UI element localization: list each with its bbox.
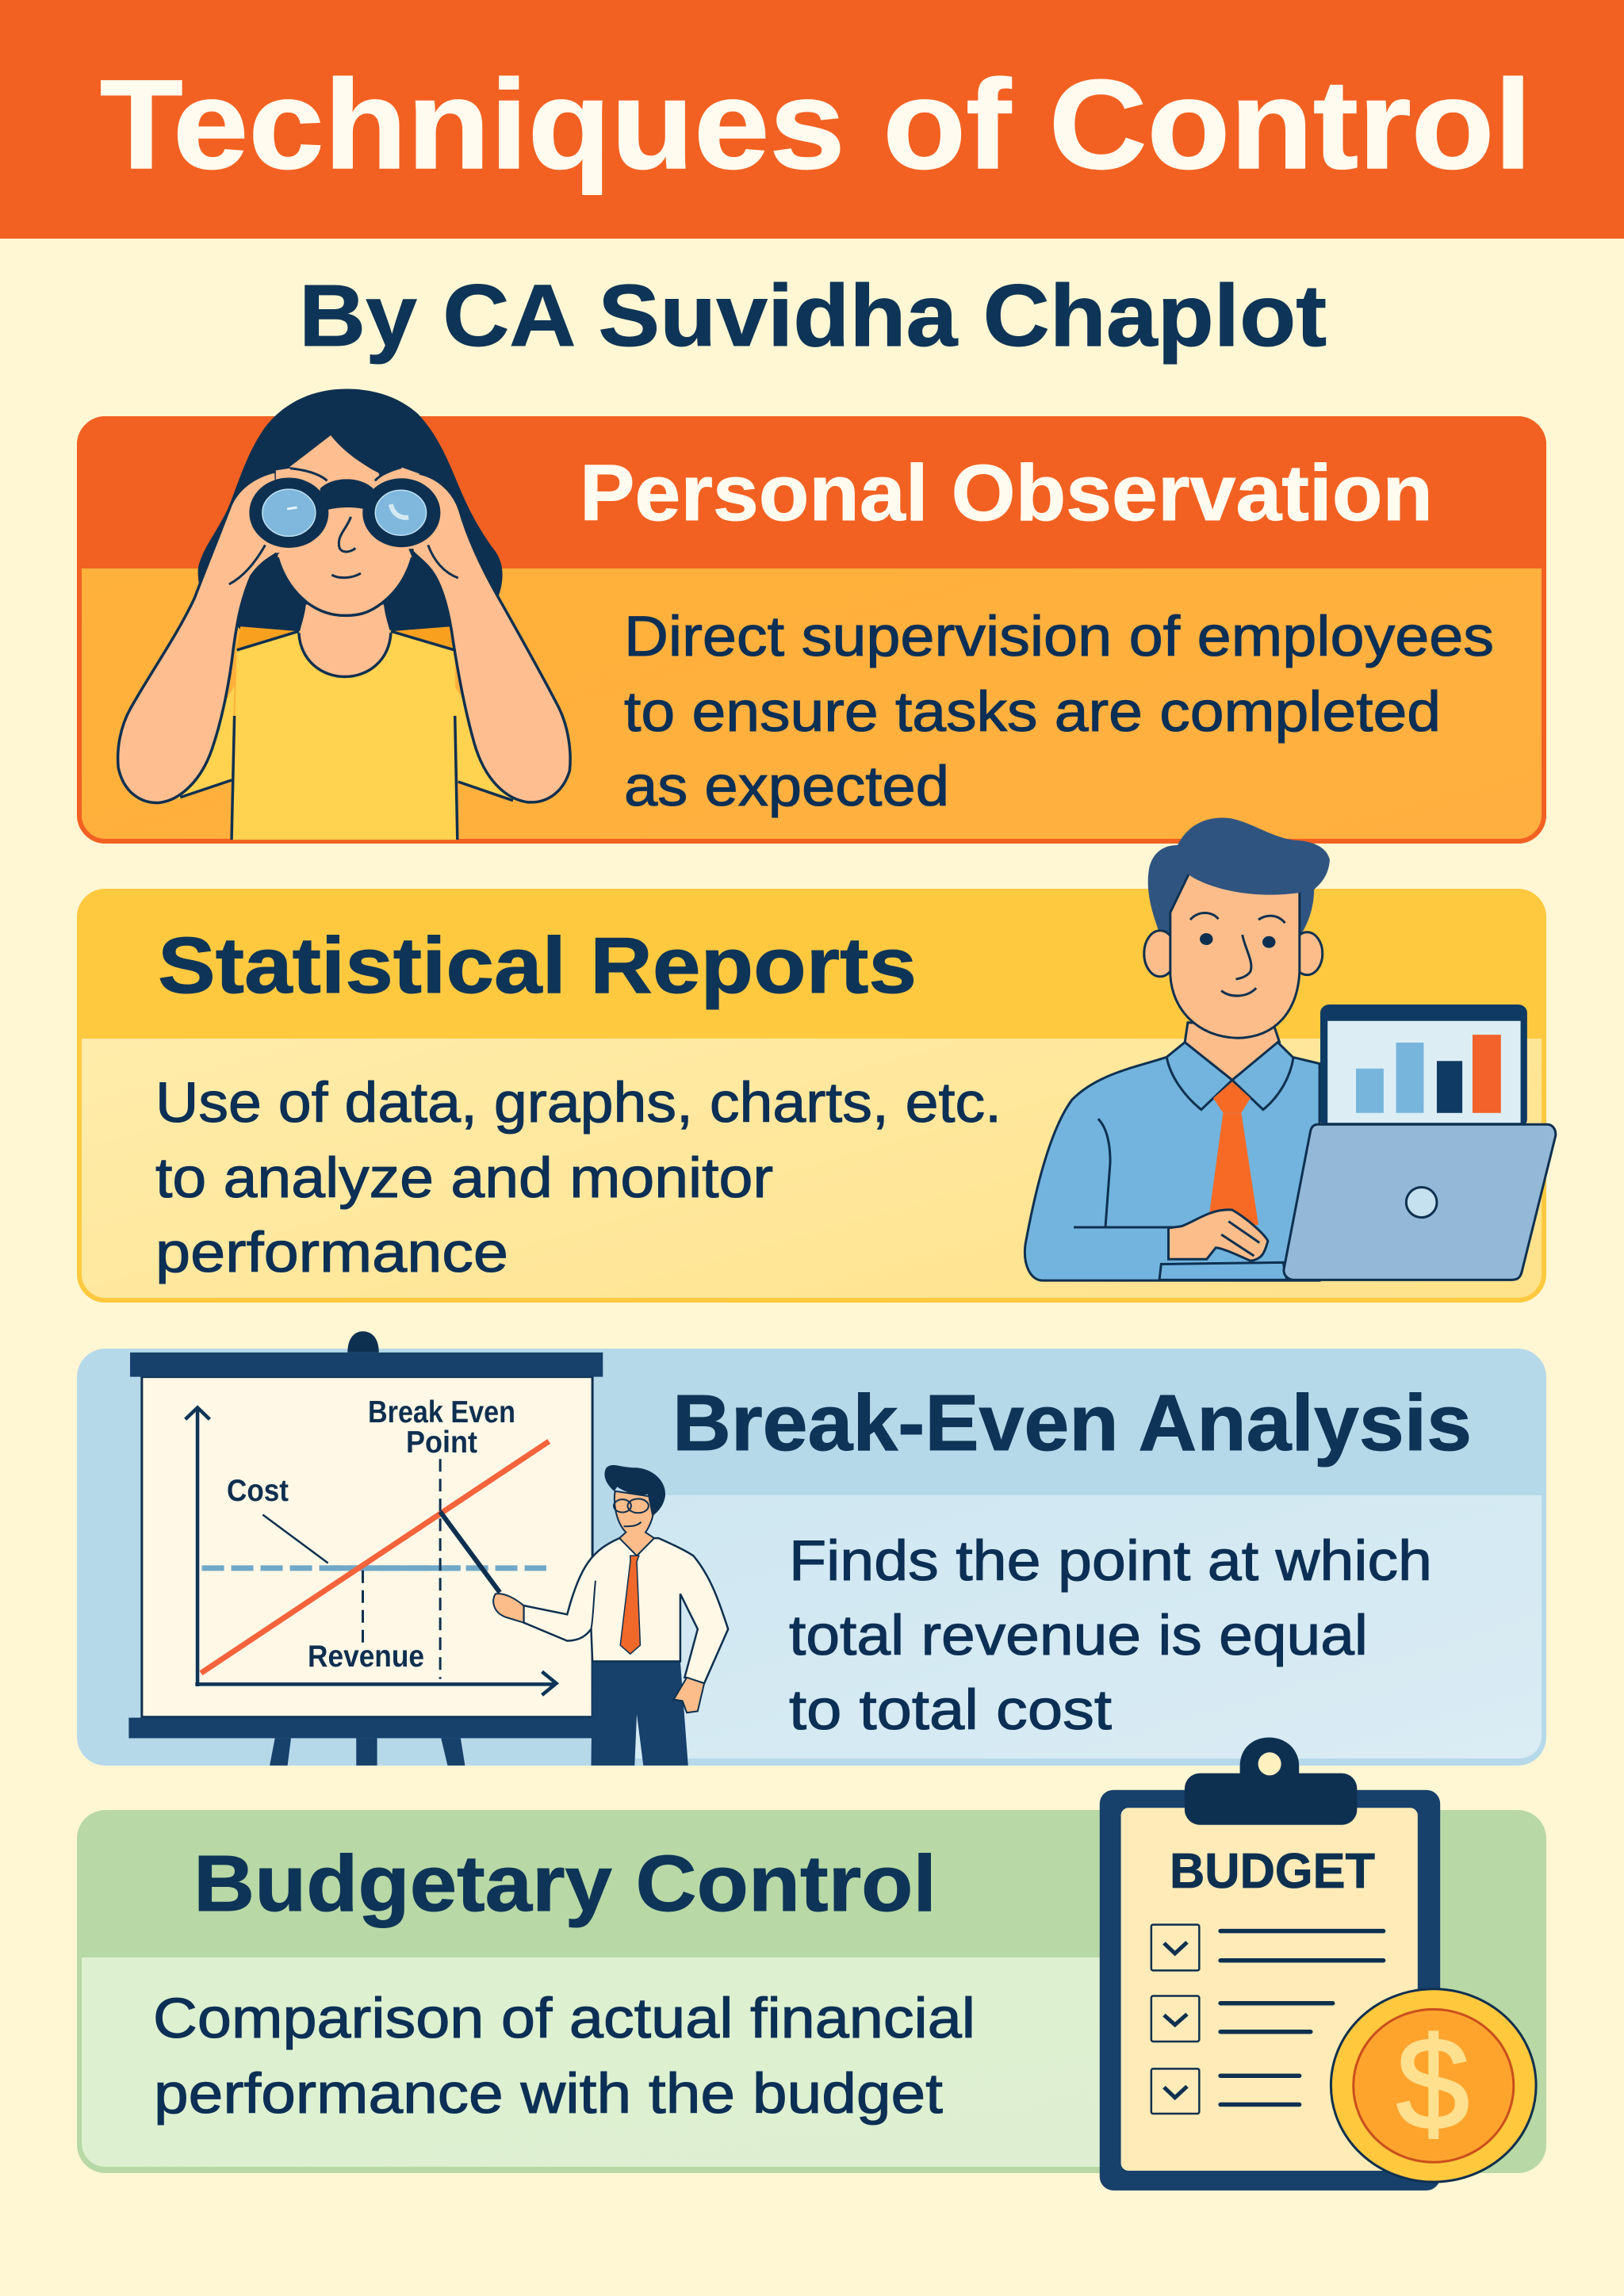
panel: budgetary control (77, 1810, 1546, 2173)
heading: personal observation: Personal Observation (580, 449, 1433, 538)
label: revenue: Revenue (308, 1640, 424, 1674)
icon: man with laptop chart (1025, 817, 1556, 1280)
icon: budget clipboard (1100, 1737, 1536, 2191)
text: personal observation description: to ensure tasks are completed (624, 681, 1441, 744)
text: personal observation description: Direct supervision of employees (624, 606, 1494, 668)
label: break even point: Point (406, 1425, 477, 1460)
icon: dollar sign: $ (1396, 2011, 1469, 2156)
icon: presenter with pointer (440, 1465, 728, 1766)
label: break even point: Break Even (368, 1395, 515, 1429)
panel: statistical reports (77, 889, 1546, 1303)
text: budgetary control description: performance with the budget (154, 2063, 943, 2126)
text: personal observation description (624, 606, 1494, 818)
chart: break-even presentation board (128, 1331, 603, 1766)
text: statistical reports description: to analyze and monitor (155, 1147, 773, 1210)
subtitle: By CA Suvidha Chaplot (299, 267, 1327, 365)
heading: budgetary control: Budgetary Control (193, 1839, 936, 1928)
text: break-even description (789, 1530, 1432, 1742)
label: cost: Cost (227, 1474, 289, 1508)
text: statistical reports description: Use of data, graphs, charts, etc. (155, 1072, 1002, 1135)
text: budgetary control description (153, 1988, 975, 2126)
heading: break-even analysis: Break-Even Analysis (672, 1379, 1472, 1468)
text: statistical reports description (155, 1072, 1002, 1284)
text: budgetary control description: Comparison of actual financial (153, 1988, 975, 2050)
heading: statistical reports: Statistical Reports (158, 921, 917, 1010)
title banner (0, 0, 1624, 239)
text: break-even description: total revenue is equal (789, 1605, 1368, 1667)
text: statistical reports description: performance (155, 1222, 508, 1284)
text: personal observation description: as expected (624, 756, 949, 818)
title: Techniques of Control (100, 53, 1532, 195)
text: break-even description: to total cost (789, 1679, 1112, 1742)
label: break even point (368, 1395, 515, 1460)
panel: personal observation (77, 416, 1546, 844)
text: break-even description: Finds the point at which (789, 1530, 1432, 1593)
icon: woman with binoculars (118, 389, 570, 840)
panel: break-even analysis (77, 1349, 1546, 1766)
label: budget: BUDGET (1170, 1844, 1375, 1899)
